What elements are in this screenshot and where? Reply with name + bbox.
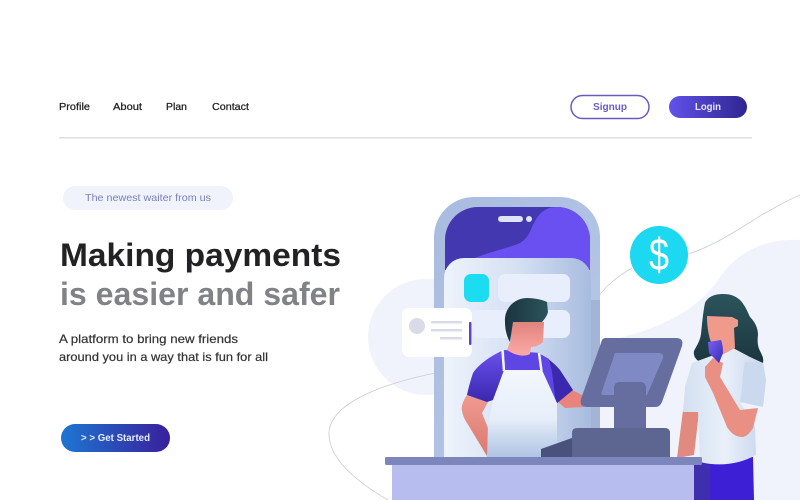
notification card bbox=[402, 308, 472, 357]
stand bbox=[614, 382, 646, 430]
illustration bbox=[329, 195, 800, 500]
shirt bbox=[683, 348, 766, 464]
right arm bbox=[558, 390, 584, 408]
face bbox=[707, 316, 738, 355]
signup button bbox=[571, 96, 649, 118]
get started button bbox=[61, 424, 170, 452]
navigation: Contact bbox=[212, 101, 249, 113]
login button bbox=[669, 96, 747, 118]
description: around you in a way that is fun for all bbox=[59, 350, 268, 364]
cyan tile bbox=[464, 274, 489, 302]
tag pill bbox=[63, 186, 233, 210]
thin curve bbox=[329, 195, 800, 500]
hair bbox=[694, 294, 763, 363]
get started button: > > Get Started bbox=[81, 433, 150, 444]
header divider bbox=[59, 137, 752, 138]
pants bbox=[694, 457, 754, 500]
screen highlight bbox=[455, 207, 590, 270]
dollar coin bbox=[630, 226, 688, 284]
speaker bbox=[498, 216, 523, 222]
row one bbox=[498, 274, 570, 302]
counter front bbox=[392, 465, 694, 500]
monitor bbox=[581, 338, 682, 407]
navigation: Plan bbox=[166, 101, 187, 113]
counter bbox=[385, 457, 702, 500]
mobile phone bbox=[708, 340, 723, 363]
left arm bbox=[462, 395, 490, 456]
man waiter bbox=[462, 298, 584, 458]
monitor screen bbox=[601, 353, 663, 395]
inner card bbox=[444, 258, 591, 458]
apron straps bbox=[502, 350, 542, 371]
phone screen bbox=[445, 207, 590, 270]
background blob right bbox=[590, 240, 800, 500]
pants shadow bbox=[694, 462, 710, 500]
near sleeve bbox=[740, 362, 766, 407]
far arm bbox=[677, 410, 699, 458]
phone bbox=[434, 197, 600, 458]
row two bbox=[470, 310, 570, 338]
base bbox=[572, 428, 670, 458]
phone edge bbox=[591, 300, 600, 458]
background blob left bbox=[368, 279, 484, 395]
apron bbox=[487, 370, 557, 458]
navigation bbox=[59, 101, 249, 113]
headline bbox=[60, 237, 341, 312]
cash register bbox=[541, 338, 682, 458]
signup button: Signup bbox=[593, 101, 627, 113]
drawer bbox=[541, 438, 572, 458]
collar bbox=[504, 350, 541, 371]
hair bbox=[505, 298, 548, 342]
woman customer bbox=[677, 294, 766, 500]
description: A platform to bring new friends bbox=[59, 332, 238, 346]
right sleeve bbox=[540, 354, 573, 404]
dollar coin: $ bbox=[649, 229, 669, 280]
tag pill: The newest waiter from us bbox=[85, 192, 211, 204]
right sleeve light bbox=[540, 354, 556, 404]
login button: Login bbox=[695, 101, 721, 113]
headline: is easier and safer bbox=[60, 276, 340, 312]
left sleeve bbox=[467, 350, 505, 402]
navigation: About bbox=[113, 101, 142, 113]
navigation: Profile bbox=[59, 101, 90, 113]
phone body bbox=[434, 197, 600, 458]
headline: Making payments bbox=[60, 237, 341, 273]
description bbox=[59, 332, 268, 364]
counter top bbox=[385, 457, 702, 465]
near arm bbox=[705, 358, 758, 437]
neck and face bbox=[507, 322, 544, 356]
camera bbox=[526, 216, 532, 222]
